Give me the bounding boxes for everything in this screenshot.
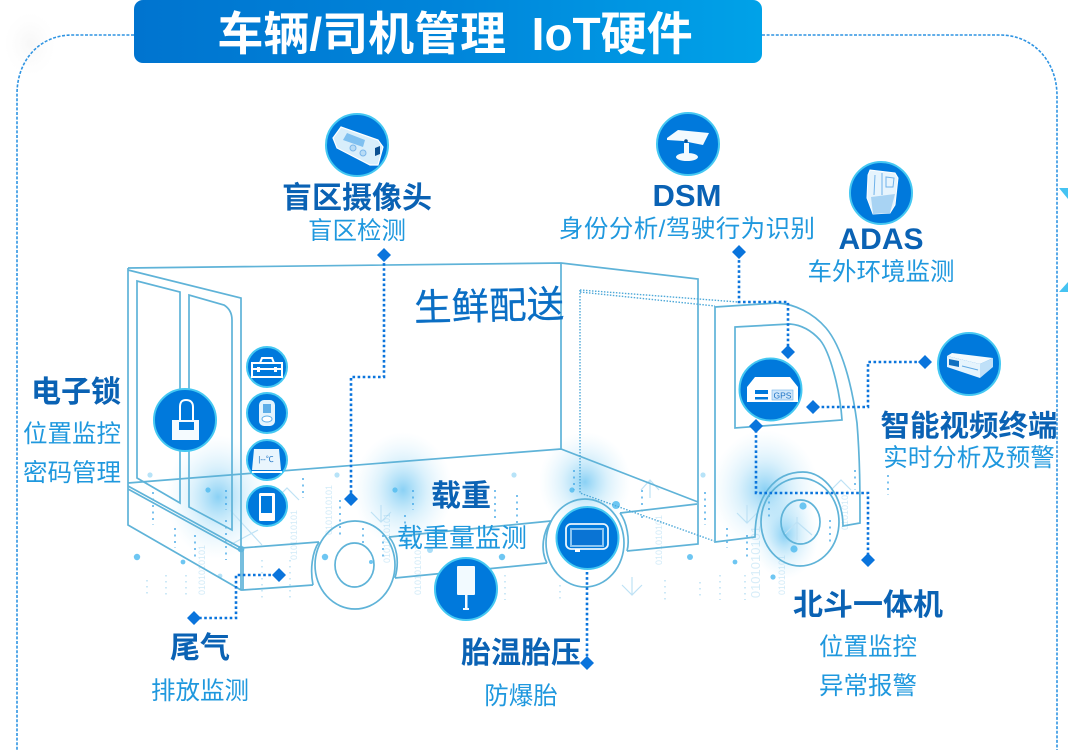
label: DSM: DSM	[653, 178, 721, 213]
connector: tire	[580, 572, 594, 670]
data glow background: 0101010101	[197, 545, 207, 595]
data glow background: 01010101	[840, 490, 850, 530]
label: video terminal: 实时分析及预警	[883, 444, 1055, 472]
data glow background: 01010101	[777, 555, 787, 595]
icon: video terminal	[938, 333, 1000, 395]
data glow background: 0101010101	[324, 485, 334, 535]
label: Beidou unit: 位置监控	[819, 633, 917, 661]
label: load: 载重	[431, 480, 491, 513]
label: exhaust	[151, 632, 249, 705]
icon: temperature recorder: |--℃	[258, 455, 274, 464]
cargo box	[128, 263, 698, 590]
cab window	[735, 324, 842, 428]
data glow background	[134, 430, 888, 600]
icon: GPS unit: GPS	[774, 390, 792, 400]
icon: GPS unit	[740, 358, 802, 420]
label: video terminal: 智能视频终端	[880, 410, 1058, 443]
label: DSM: 身份分析/驾驶行为识别	[559, 215, 815, 243]
rear door panels	[137, 281, 232, 530]
label: load	[397, 480, 527, 553]
icon: blind spot camera	[326, 114, 388, 176]
label: tire monitoring: 防爆胎	[484, 682, 558, 710]
cab	[715, 303, 860, 542]
middle wheel	[546, 499, 624, 587]
connector: DSM	[732, 245, 795, 359]
label: electronic lock: 电子锁	[31, 376, 121, 409]
data glow background: 0101010101	[289, 510, 299, 560]
label: video terminal	[880, 410, 1058, 472]
label: exhaust: 尾气	[170, 632, 230, 665]
label: ADAS: 车外环境监测	[808, 258, 954, 286]
connector: Beidou unit	[749, 419, 875, 567]
icon: phone terminal	[247, 486, 287, 526]
fine dotted inner frame	[580, 290, 738, 541]
label: blind-spot camera: 盲区摄像头	[282, 182, 432, 215]
icon: DSM camera	[657, 113, 719, 175]
truck illustration	[128, 263, 860, 609]
data glow background: 0101010101	[748, 526, 763, 598]
icon: right edge arrows	[1059, 188, 1068, 292]
truck label: 生鲜配送: 生鲜配送	[414, 283, 565, 329]
icon: load sensor	[435, 558, 497, 620]
connector: blind-spot camera	[344, 248, 391, 506]
title: 车辆/司机管理 IoT硬件	[217, 8, 693, 60]
icon: handheld device	[247, 393, 287, 433]
label: Beidou unit: 异常报警	[819, 672, 917, 700]
icon: ADAS device	[850, 162, 912, 224]
label: electronic lock: 位置监控	[23, 420, 121, 448]
label: tire monitoring: 胎温胎压	[461, 637, 581, 670]
icon: tire monitor	[556, 507, 618, 569]
data glow background: 0101010101	[413, 545, 423, 595]
label: DSM	[559, 178, 815, 243]
label: Beidou unit	[793, 589, 943, 700]
title banner	[134, 0, 762, 63]
icon: toolbox	[247, 347, 287, 387]
icon: temperature recorder	[247, 440, 287, 480]
data glow background: 0101010101	[382, 513, 392, 563]
label: exhaust: 排放监测	[151, 677, 249, 705]
front wheel	[761, 478, 839, 566]
connector: exhaust	[187, 568, 286, 625]
label: tire monitoring	[461, 637, 581, 710]
label: blind-spot camera	[282, 182, 432, 245]
chassis	[128, 486, 319, 551]
icon: electronic lock	[154, 389, 216, 451]
label: Beidou unit: 北斗一体机	[793, 589, 943, 622]
label: electronic lock: 密码管理	[23, 459, 121, 487]
label: electronic lock	[23, 376, 121, 487]
label: load: 载重量监测	[397, 523, 527, 553]
label: ADAS	[808, 223, 954, 286]
connector: video terminal	[806, 355, 932, 414]
label: blind-spot camera: 盲区检测	[308, 217, 406, 245]
data glow background: 0101010101	[654, 515, 664, 565]
rear wheel	[312, 537, 397, 585]
label: ADAS: ADAS	[838, 223, 924, 256]
